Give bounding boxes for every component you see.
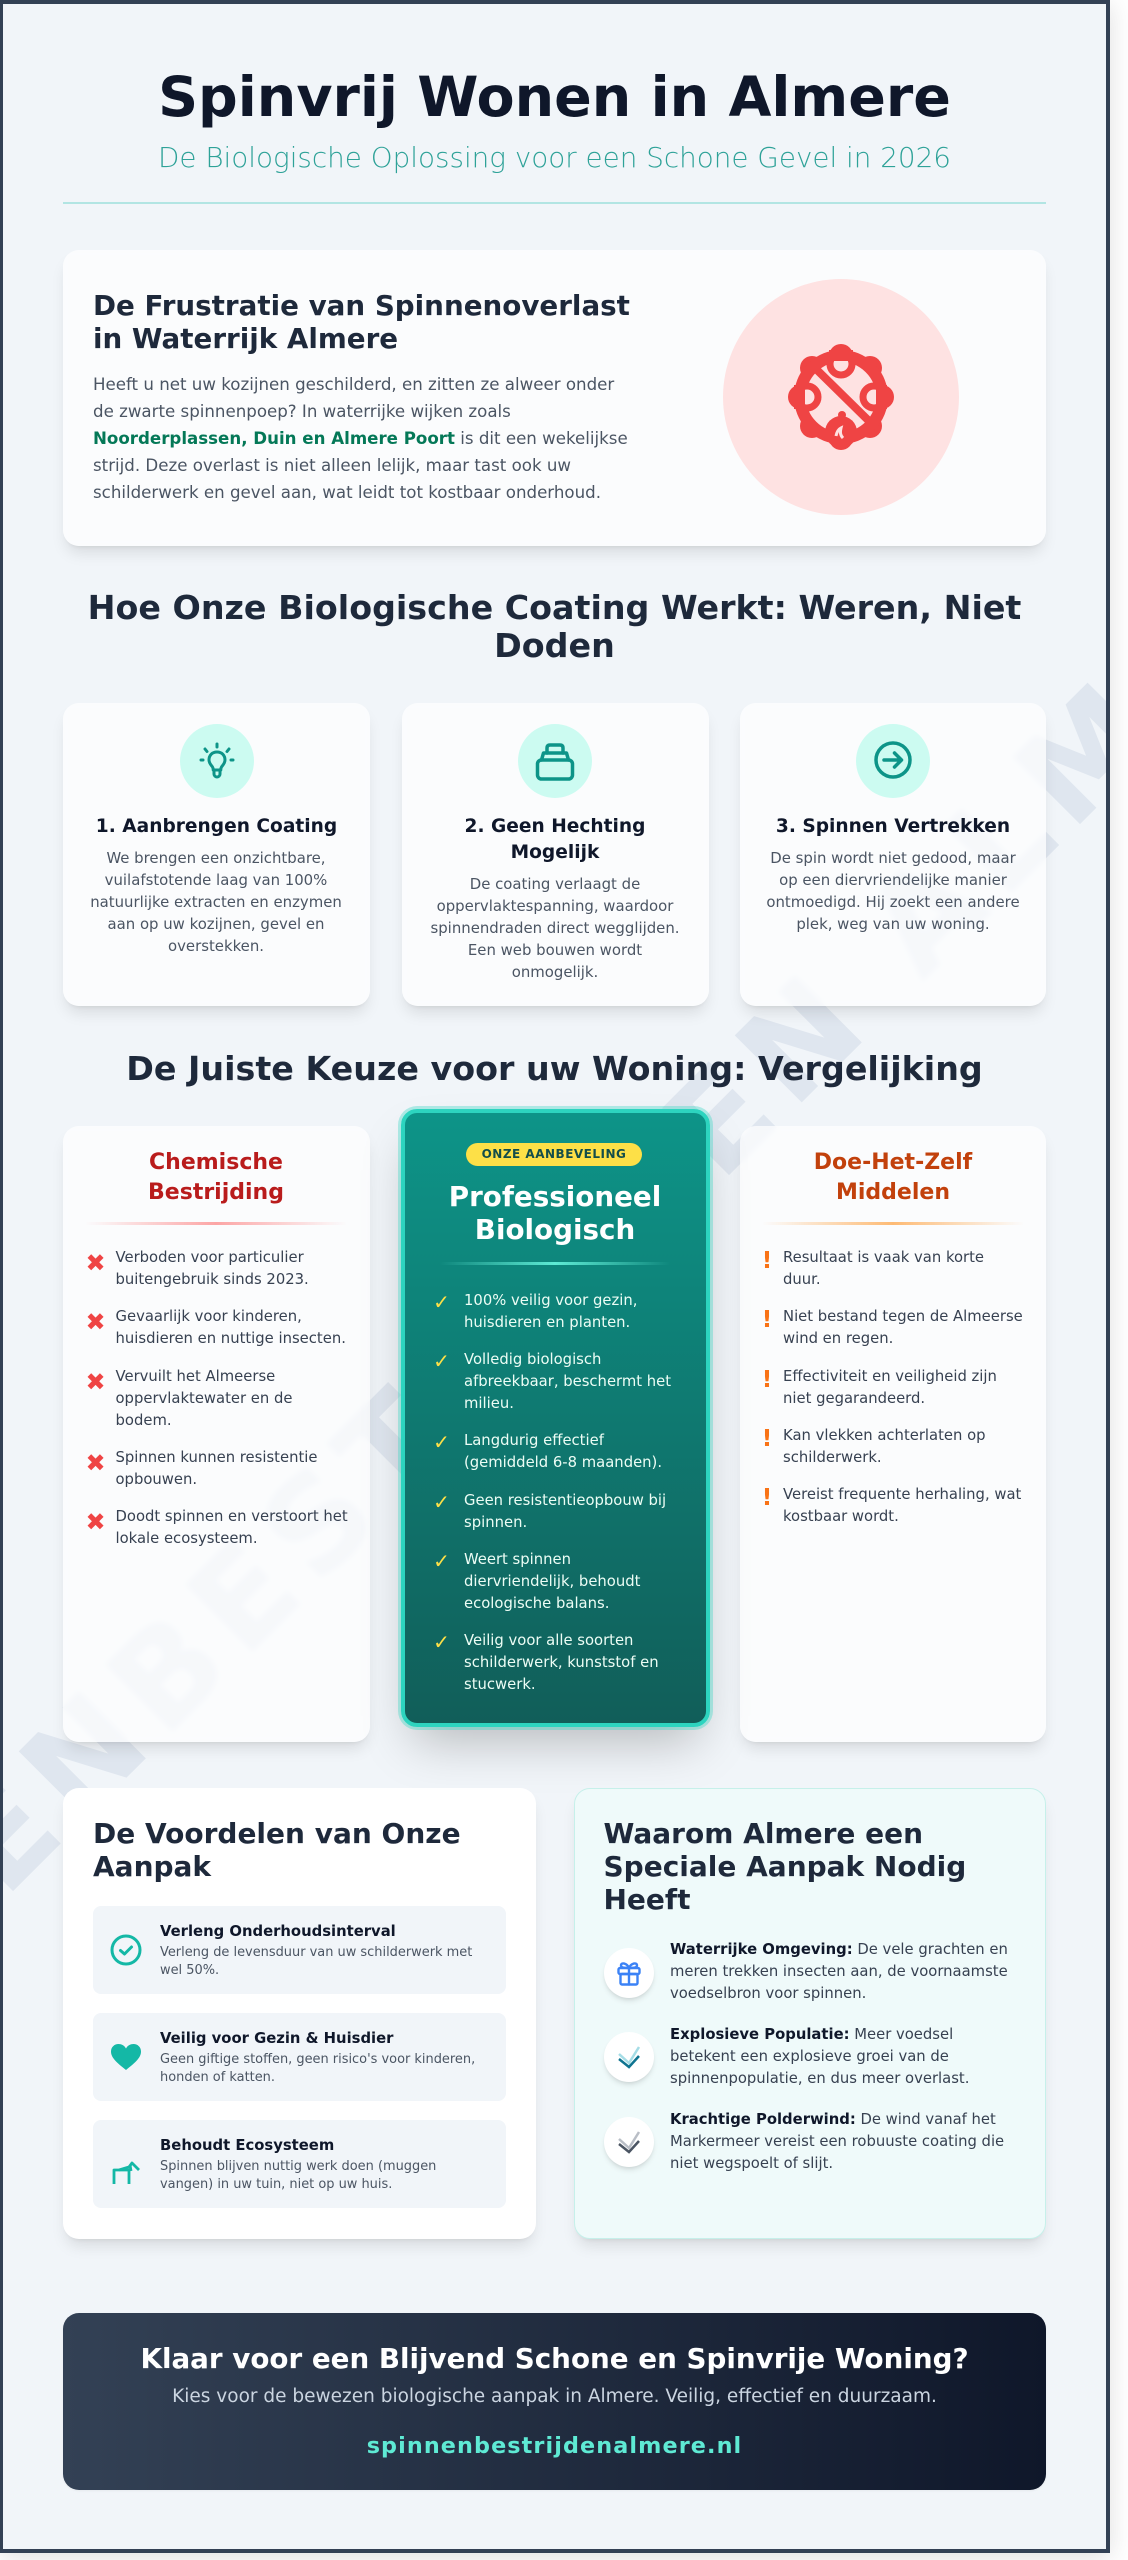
list: biological benefits: ✓ — [433, 1490, 450, 1514]
list: biological benefits: huisdieren en planten. — [464, 1314, 630, 1331]
heading: why Almere: Speciale Aanpak Nodig — [604, 1850, 966, 1883]
list: chemical drawbacks: lokale ecosysteem. — [116, 1530, 258, 1547]
column title — [449, 1180, 661, 1246]
header divider — [63, 202, 1046, 204]
benefit: maintenance — [93, 1906, 506, 1994]
step description: overstekken. — [168, 937, 264, 955]
list: chemical drawbacks: bodem. — [116, 1412, 172, 1429]
list: DIY drawbacks: ! — [762, 1248, 772, 1274]
step description: Een web bouwen wordt — [468, 941, 642, 959]
badge: recommendation — [466, 1143, 642, 1166]
list: DIY drawbacks: Kan vlekken achterlaten op — [783, 1426, 986, 1444]
heading: how it works — [88, 588, 1021, 665]
CTA title: Klaar voor een Blijvend Schone en Spinvrije Woning? — [140, 2342, 969, 2375]
step description: plek, weg van uw woning. — [796, 915, 990, 933]
text: polder wind — [670, 2111, 1004, 2172]
text: frustration body: Noorderplassen, Duin en Almere Poort is dit een wekelijkse — [93, 429, 628, 448]
step title — [465, 816, 645, 863]
text: frustration body: de zwarte spinnenpoep? In waterrijke wijken zoals — [93, 402, 511, 421]
icon: no spider badge — [723, 279, 959, 515]
column title: Bestrijding — [148, 1180, 284, 1205]
list: chemical drawbacks: Doodt spinnen en verstoort het — [116, 1508, 348, 1525]
benefit: ecosystem: Behoudt Ecosysteem — [160, 2137, 334, 2154]
panel: professional biological — [400, 1109, 710, 1727]
icon: plant arrow — [112, 2162, 140, 2184]
step description — [90, 848, 342, 955]
list: chemical drawbacks: Gevaarlijk voor kinderen, — [116, 1308, 302, 1325]
step description: onmogelijk. — [512, 963, 598, 981]
benefit: safe — [93, 2013, 506, 2101]
list: chemical drawbacks: opbouwen. — [116, 1471, 197, 1488]
step description: op een diervriendelijke manier — [779, 871, 1007, 889]
text: explosive population: Explosieve Populatie: Meer voedsel — [670, 2026, 953, 2043]
list: DIY drawbacks: duur. — [783, 1271, 821, 1288]
step description: spinnendraden direct wegglijden. — [430, 919, 680, 937]
panel: benefits — [63, 1788, 536, 2239]
step description: De spin wordt niet gedood, maar — [770, 848, 1016, 866]
column title: Chemische — [149, 1150, 283, 1175]
list: chemical drawbacks: ✖ — [85, 1448, 106, 1476]
list: chemical drawbacks: huisdieren en nuttige insecten. — [116, 1330, 346, 1347]
list: DIY drawbacks: kostbaar wordt. — [783, 1508, 899, 1525]
step title: Mogelijk — [511, 842, 599, 863]
step title: 2. Geen Hechting — [465, 816, 645, 837]
list: biological benefits: spinnen. — [464, 1514, 527, 1531]
panel: step 2 — [402, 703, 708, 1006]
accent line — [440, 1262, 670, 1265]
list: chemical drawbacks: Spinnen kunnen resistentie — [116, 1448, 317, 1466]
list: DIY drawbacks — [762, 1248, 1023, 1525]
text: watery surroundings — [670, 1940, 1008, 2002]
list: biological benefits: 100% veilig voor gezin, — [464, 1292, 637, 1309]
benefit: maintenance: Verleng Onderhoudsinterval — [160, 1923, 396, 1940]
text: frustration body — [93, 375, 628, 502]
list: chemical drawbacks: ✖ — [85, 1368, 106, 1396]
column title: Professioneel — [449, 1180, 661, 1213]
panel: step 3 — [740, 703, 1046, 1006]
benefit: maintenance: wel 50%. — [160, 1963, 219, 1978]
heading: how it works: Doden — [494, 626, 615, 665]
text: explosive population: betekent een explosieve groei van de — [670, 2048, 949, 2065]
heading: benefits: De Voordelen van Onze — [93, 1816, 461, 1850]
icon: lightbulb — [180, 724, 254, 798]
panel: why Almere — [574, 1788, 1046, 2239]
step description — [430, 874, 680, 981]
column title: Doe-Het-Zelf — [814, 1150, 972, 1175]
panel: call to action — [63, 2313, 1046, 2490]
heading: why Almere: Waarom Almere een — [604, 1817, 923, 1850]
CTA subtitle: Kies voor de bewezen biologische aanpak in Almere. Veilig, effectief en duurzaam. — [172, 2386, 937, 2407]
list: DIY drawbacks: schilderwerk. — [783, 1449, 882, 1466]
list: chemical drawbacks: ✖ — [85, 1308, 106, 1336]
step description: natuurlijke extracten en enzymen — [90, 893, 342, 911]
step description: ontmoedigd. Hij zoekt een andere — [766, 893, 1020, 911]
column title: Biologisch — [475, 1213, 635, 1246]
benefit: safe: Veilig voor Gezin & Huisdier — [160, 2030, 393, 2047]
list: biological benefits: (gemiddeld 6-8 maanden). — [464, 1454, 662, 1471]
text: watery surroundings: Waterrijke Omgeving: De vele grachten en — [670, 1940, 1008, 1958]
list: DIY drawbacks: wind en regen. — [783, 1330, 893, 1347]
icon: arrow circle — [856, 724, 930, 798]
step description: oppervlaktespanning, waardoor — [437, 897, 673, 915]
list: biological benefits — [433, 1290, 671, 1693]
panel: step 1 — [63, 703, 370, 1006]
heading: why Almere — [604, 1817, 966, 1916]
list: chemical drawbacks: oppervlaktewater en de — [116, 1390, 292, 1407]
icon: grey double check — [604, 2117, 654, 2167]
list: DIY drawbacks: ! — [762, 1426, 772, 1452]
list: DIY drawbacks: ! — [762, 1307, 772, 1333]
list: chemical drawbacks: ✖ — [85, 1508, 106, 1536]
list: chemical drawbacks: buitengebruik sinds 2023. — [116, 1271, 309, 1288]
step title: 1. Aanbrengen Coating — [96, 816, 337, 837]
list: biological benefits: Langdurig effectief — [464, 1432, 604, 1449]
list: DIY drawbacks: Resultaat is vaak van korte — [783, 1249, 984, 1266]
heading: frustration: De Frustratie van Spinnenoverlast — [93, 289, 630, 322]
benefit: ecosystem: Spinnen blijven nuttig werk doen (muggen — [160, 2159, 436, 2174]
list: chemical drawbacks: ✖ — [85, 1249, 106, 1277]
step description — [766, 848, 1020, 933]
list: biological benefits: Veilig voor alle soorten — [464, 1632, 633, 1649]
list: chemical drawbacks: Verboden voor particulier — [116, 1249, 304, 1266]
list: DIY drawbacks: ! — [762, 1484, 772, 1510]
benefit: safe: honden of katten. — [160, 2070, 275, 2085]
icon: heart — [111, 2044, 141, 2070]
list: chemical drawbacks — [85, 1249, 348, 1547]
text: polder wind: Markermeer vereist een robuuste coating die — [670, 2133, 1004, 2150]
list: biological benefits: ✓ — [433, 1630, 450, 1654]
text: explosive population: spinnenpopulatie, en dus meer overlast. — [670, 2070, 969, 2087]
badge: recommendation: ONZE AANBEVELING — [482, 1147, 626, 1161]
list: DIY drawbacks: Vereist frequente herhaling, wat — [783, 1486, 1021, 1502]
heading: comparison: De Juiste Keuze voor uw Woning: Vergelijking — [126, 1049, 983, 1088]
heading: why Almere: Heeft — [604, 1883, 690, 1916]
list: biological benefits: ecologische balans. — [464, 1595, 609, 1612]
benefit: maintenance: Verleng de levensduur van uw schilderwerk met — [160, 1945, 472, 1960]
heading: benefits: Aanpak — [93, 1850, 211, 1883]
CTA website: spinnenbestrijdenalmere.nl — [367, 2433, 742, 2459]
icon: teal double check — [604, 2032, 654, 2082]
step description: aan op uw kozijnen, gevel en — [108, 915, 324, 933]
list: biological benefits: ✓ — [433, 1430, 450, 1454]
icon: jar — [518, 724, 592, 798]
text: explosive population — [670, 2026, 969, 2087]
step description: De coating verlaagt de — [470, 874, 640, 892]
list: biological benefits: ✓ — [433, 1349, 450, 1373]
icon: gift — [604, 1948, 654, 1998]
subtitle: De Biologische Oplossing voor een Schone Gevel in 2026 — [158, 140, 951, 174]
heading: frustration: in Waterrijk Almere — [93, 322, 398, 355]
step title: 3. Spinnen Vertrekken — [776, 816, 1010, 837]
text: frustration body: Heeft u net uw kozijnen geschilderd, en zitten ze alweer onder — [93, 375, 614, 394]
heading: frustration — [93, 289, 630, 355]
list: biological benefits: ✓ — [433, 1548, 450, 1572]
accent line — [85, 1222, 347, 1225]
list: biological benefits: stucwerk. — [464, 1676, 536, 1693]
column title — [814, 1150, 972, 1205]
list: DIY drawbacks: Niet bestand tegen de Almeerse — [783, 1308, 1023, 1325]
text: polder wind: Krachtige Polderwind: De wind vanaf het — [670, 2111, 996, 2128]
benefit: ecosystem: vangen) in uw tuin, niet op uw huis. — [160, 2177, 392, 2192]
heading: how it works: Hoe Onze Biologische Coating Werkt: Weren, Niet — [88, 588, 1021, 627]
column title: Middelen — [836, 1180, 950, 1205]
panel: chemical treatment — [63, 1126, 370, 1742]
list: biological benefits: afbreekbaar, beschermt het — [464, 1373, 671, 1390]
text: polder wind: niet wegspoelt of slijt. — [670, 2155, 833, 2172]
benefit: ecosystem — [93, 2120, 506, 2208]
list: biological benefits: Weert spinnen — [464, 1550, 571, 1568]
list: biological benefits: ✓ — [433, 1290, 450, 1314]
title: Spinvrij Wonen in Almere — [158, 65, 951, 130]
list: biological benefits: diervriendelijk, behoudt — [464, 1573, 640, 1590]
column title — [148, 1150, 284, 1205]
text: watery surroundings: voedselbron voor spinnen. — [670, 1985, 866, 2002]
text: frustration body: strijd. Deze overlast is niet alleen lelijk, maar tast ook uw — [93, 456, 571, 475]
panel: frustration intro — [63, 250, 1046, 546]
panel: do it yourself — [740, 1126, 1046, 1742]
benefit: safe: Geen giftige stoffen, geen risico's voor kinderen, — [160, 2052, 475, 2067]
list: DIY drawbacks: ! — [762, 1366, 772, 1392]
list: biological benefits: Geen resistentieopbouw bij — [464, 1492, 666, 1508]
list: biological benefits: schilderwerk, kunststof en — [464, 1654, 659, 1671]
step description: vuilafstotende laag van 100% — [105, 871, 327, 889]
list: chemical drawbacks: Vervuilt het Almeerse — [116, 1368, 275, 1384]
list: DIY drawbacks: Effectiviteit en veiligheid zijn — [783, 1368, 997, 1384]
icon: check circle — [110, 1934, 142, 1966]
list: DIY drawbacks: niet gegarandeerd. — [783, 1390, 925, 1407]
step description: We brengen een onzichtbare, — [106, 848, 326, 866]
heading: benefits — [93, 1816, 461, 1883]
text: watery surroundings: meren trekken insecten aan, de voornaamste — [670, 1963, 1008, 1980]
list: biological benefits: milieu. — [464, 1395, 514, 1412]
list: biological benefits: Volledig biologisch — [464, 1351, 601, 1368]
text: frustration body: schilderwerk en gevel aan, wat leidt tot kostbaar onderhoud. — [93, 483, 601, 502]
accent line — [762, 1222, 1024, 1225]
